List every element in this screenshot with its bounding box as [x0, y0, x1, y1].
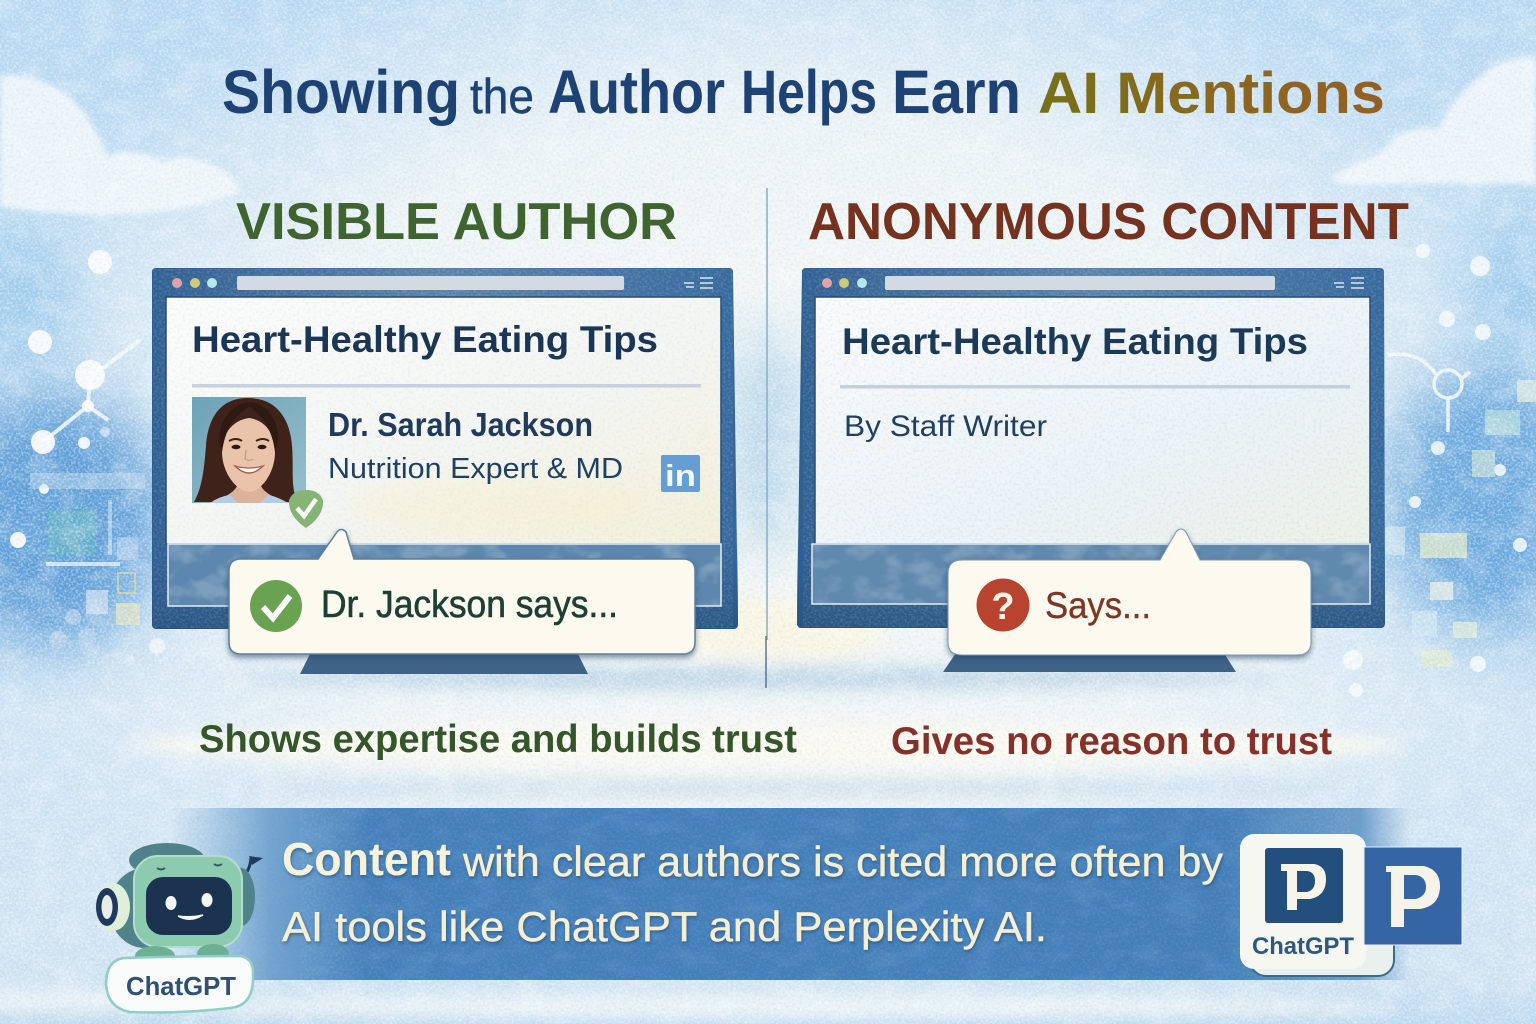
monitor stand	[943, 650, 1236, 672]
linkedin icon: in	[665, 458, 696, 493]
title: Earn	[892, 58, 1021, 126]
browser frame	[152, 268, 738, 629]
panel: visible author browser window	[152, 268, 738, 674]
icon: chatgpt robot mascot: ChatGPT	[126, 971, 236, 1001]
author role: Nutrition Expert & MD	[328, 453, 623, 485]
address bar	[237, 276, 624, 290]
network and data decoration: right	[1343, 244, 1536, 697]
dark p logo	[1265, 848, 1343, 923]
title: Author	[548, 58, 725, 126]
page content	[815, 297, 1370, 544]
header rule	[192, 384, 701, 388]
callout: says: Says...	[1045, 585, 1151, 626]
icon: chatgpt robot mascot	[96, 843, 263, 1012]
robot face	[134, 856, 242, 947]
callout: dr jackson says: Dr. Jackson says...	[321, 584, 618, 626]
blue p logo	[1364, 847, 1462, 945]
menu icon	[684, 278, 713, 288]
window dots	[172, 278, 217, 288]
address bar	[885, 276, 1275, 290]
browser frame	[797, 268, 1385, 628]
menu icon	[1334, 278, 1364, 288]
article title: Heart-Healthy Eating Tips	[192, 319, 658, 360]
callout: says: ?	[991, 586, 1015, 628]
banner message: with clear authors is cited more often by	[462, 838, 1223, 885]
robot screen	[146, 877, 232, 935]
linkedin icon	[661, 455, 700, 493]
network and data decoration: left	[10, 250, 165, 672]
author portrait	[192, 397, 306, 503]
centre divider	[766, 188, 767, 688]
card shadow	[1250, 880, 1394, 976]
author name: Dr. Sarah Jackson	[328, 406, 593, 443]
callout: says	[948, 529, 1311, 655]
lower page strip	[812, 544, 1370, 604]
chatgpt label	[106, 956, 253, 1012]
clouds	[0, 56, 1536, 214]
caption: visible author: Shows expertise and builds trust	[199, 718, 797, 761]
title: Helps	[741, 58, 877, 126]
title: the	[470, 70, 534, 124]
panel: anonymous content browser window	[797, 268, 1385, 672]
icon: ai tool logos	[1240, 834, 1462, 976]
chatgpt caption: ChatGPT	[1252, 933, 1354, 960]
caption: anonymous content: Gives no reason to trust	[891, 720, 1332, 763]
banner message: AI tools like ChatGPT and Perplexity AI.	[282, 903, 1047, 950]
title: AI Mentions	[1038, 61, 1385, 126]
banner message: Content	[282, 833, 451, 885]
lower page strip	[168, 544, 721, 606]
verified badge	[289, 490, 323, 528]
page content	[166, 297, 721, 544]
antenna	[240, 858, 251, 880]
heading: anonymous content: ANONYMOUS CONTENT	[808, 193, 1409, 251]
callout: dr jackson says	[229, 530, 695, 654]
window dots	[822, 278, 867, 288]
header rule	[840, 385, 1350, 388]
title	[222, 58, 1385, 126]
bottom banner	[170, 808, 1410, 980]
robot feet	[135, 946, 175, 966]
title: Showing	[222, 58, 460, 126]
robot ear	[96, 883, 130, 931]
banner message	[282, 833, 1223, 950]
article title: Heart-Healthy Eating Tips	[842, 321, 1308, 362]
heading: visible author: VISIBLE AUTHOR	[236, 193, 677, 251]
byline: By Staff Writer	[844, 410, 1047, 443]
robot head back	[129, 843, 205, 877]
white logo card	[1240, 834, 1366, 969]
monitor stand	[300, 650, 588, 674]
